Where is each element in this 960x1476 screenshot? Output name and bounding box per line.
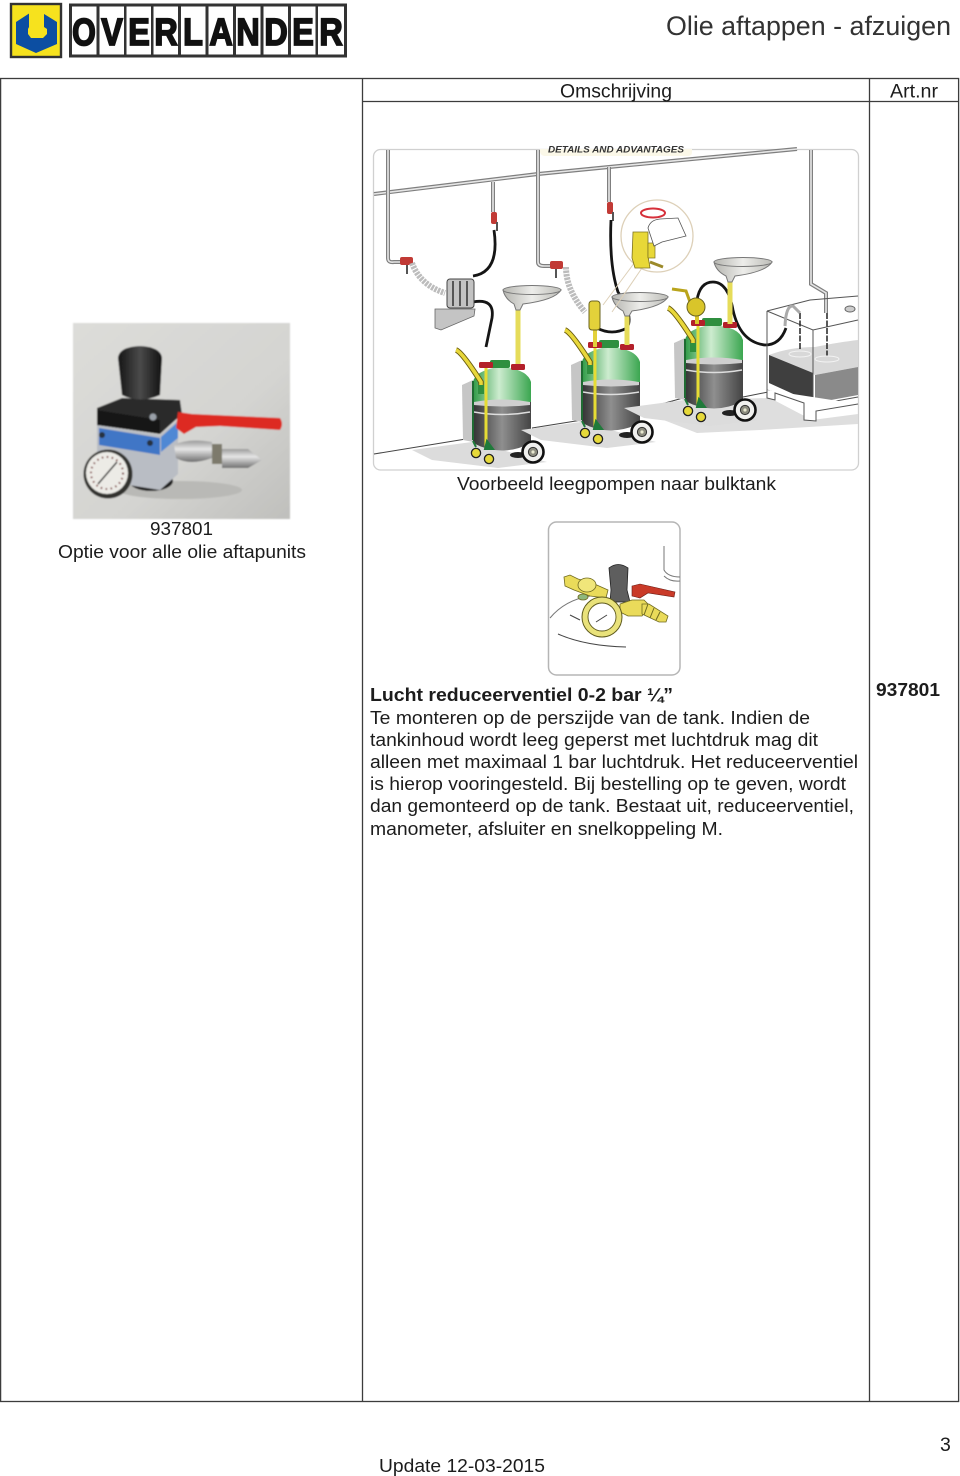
black hoses — [473, 220, 786, 347]
logo lettering — [69, 4, 347, 58]
caption: option: Optie voor alle olie aftapunits — [58, 541, 306, 562]
product photo: pressure regulator — [73, 323, 290, 519]
air hoses — [412, 263, 585, 312]
knob — [118, 346, 162, 400]
footer: page number: 3 — [940, 1434, 951, 1456]
red valves — [400, 202, 613, 269]
funnels — [503, 258, 772, 316]
description text block: Te monteren op de perszijde van de tank. Indien de — [370, 707, 810, 728]
logo lettering: E — [292, 12, 314, 54]
diaphragm pump on bracket — [435, 279, 475, 330]
description text block — [370, 684, 858, 839]
red lever — [632, 584, 675, 598]
logo lettering: N — [236, 12, 260, 54]
logo lettering: E — [128, 12, 150, 54]
bulk tank — [767, 296, 858, 421]
detail callout circle — [621, 200, 693, 272]
detail callout lines — [603, 262, 642, 312]
caption: illustration: Voorbeeld leegpompen naar bulktank — [457, 473, 777, 494]
floor shadow near bulk tank — [643, 398, 858, 433]
description text block: dan gemonteerd op de tank. Bestaat uit, reduceerventiel, — [370, 795, 854, 816]
article number: 937801 — [876, 679, 940, 700]
silver coupling — [174, 441, 212, 462]
column header: Art.nr: Art.nr — [890, 82, 939, 102]
hand pump on third tank — [672, 289, 705, 324]
logo lettering: R — [154, 12, 178, 54]
black block — [97, 398, 182, 434]
pressure gauge — [84, 450, 132, 498]
product name: Lucht reduceerventiel 0-2 bar ¼” — [370, 684, 673, 705]
description text block: manometer, afsluiter en snelkoppeling M. — [370, 818, 723, 839]
description text block: is hierop vooringesteld. Bij bestelling op te geven, wordt — [370, 773, 847, 794]
logo: Overlander — [11, 4, 347, 58]
description text block: alleen met maximaal 1 bar luchtdruk. Het reduceerventiel — [370, 751, 858, 772]
blue body — [97, 420, 178, 490]
caption: article number: 937801 — [150, 518, 213, 539]
logo lettering: D — [264, 12, 288, 54]
logo lettering: L — [183, 12, 203, 54]
illustration frame — [374, 150, 858, 470]
oil tank units — [412, 350, 547, 468]
right fitting — [620, 600, 668, 622]
left fitting — [564, 575, 608, 600]
column header: Omschrijving: Omschrijving — [560, 82, 672, 102]
air pump on second tank — [589, 301, 600, 347]
regulator knob — [609, 564, 630, 602]
detail drawing: regulator on tank — [548, 522, 680, 675]
label tab: details and advantages: DETAILS AND ADVANTAGES — [548, 144, 685, 156]
footer: update date: Update 12-03-2015 — [379, 1455, 545, 1476]
illustration: emptying into bulk tank — [374, 144, 858, 470]
funnel tubes — [518, 280, 730, 364]
logo lettering: A — [209, 12, 233, 54]
logo lettering: O — [72, 12, 96, 54]
bottom bowl — [129, 471, 173, 491]
floor line — [374, 392, 768, 454]
logo lettering: R — [319, 12, 343, 54]
red handle — [176, 412, 282, 434]
icon: hexagon nut emblem — [11, 4, 61, 57]
title: Olie aftappen - afzuigen — [666, 11, 951, 41]
gauge — [582, 597, 622, 637]
description text block: tankinhoud wordt leeg geperst met luchtdruk mag dit — [370, 729, 819, 750]
overhead air line — [374, 149, 826, 313]
logo lettering: V — [101, 12, 123, 54]
